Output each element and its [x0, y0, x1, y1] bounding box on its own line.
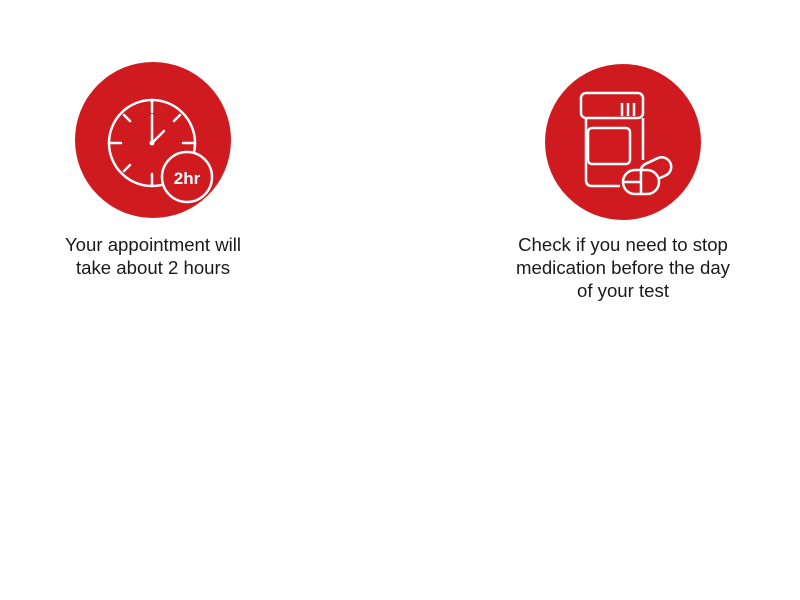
text: medication check: Check if you need to stop — [518, 234, 728, 255]
text: appointment duration — [65, 234, 241, 278]
text: medication check — [516, 234, 730, 301]
text: medication check: of your test — [577, 280, 669, 301]
text: medication check: medication before the day — [516, 257, 730, 278]
text: appointment duration: Your appointment will — [65, 234, 241, 255]
text: appointment duration: take about 2 hours — [76, 257, 230, 278]
icon: clock with 2hr badge: 2hr — [174, 169, 201, 188]
